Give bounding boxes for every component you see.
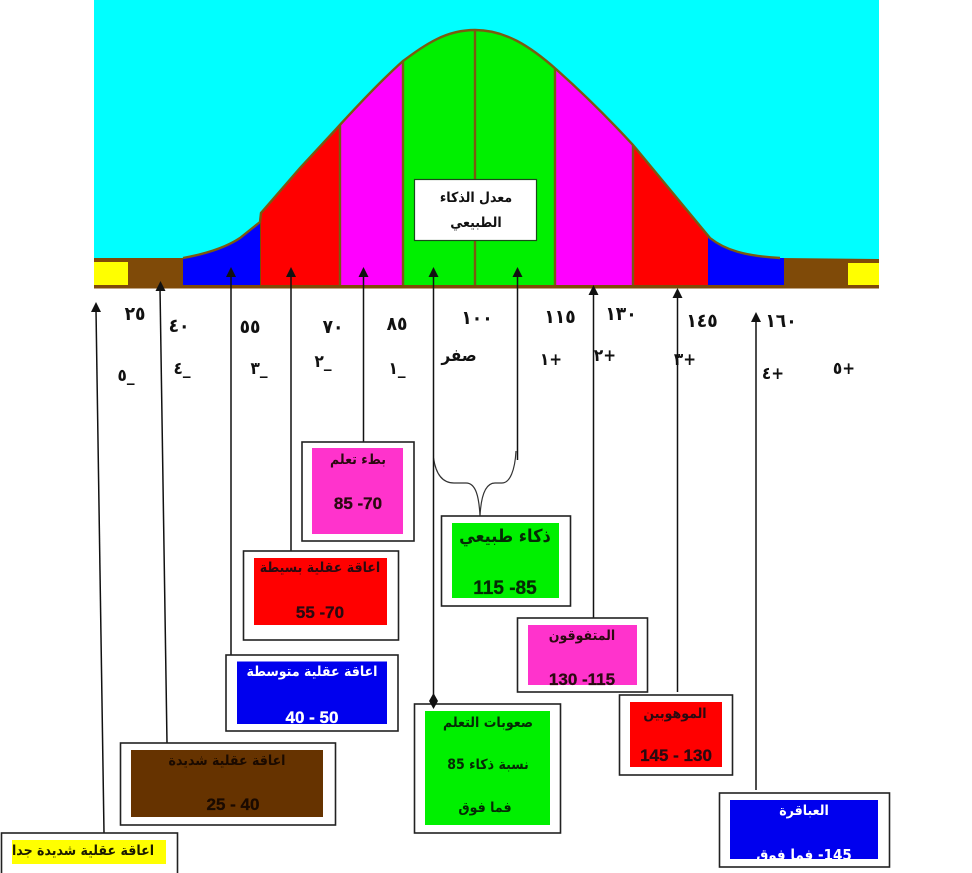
arrow: slow learner	[358, 267, 368, 442]
standard deviation labels: ٢_	[314, 352, 332, 372]
standard deviation labels: ٢+	[594, 346, 616, 366]
label: average intelligence: معدل الذكاء	[440, 190, 512, 206]
panel: superior: المتفوقون	[549, 628, 615, 644]
standard deviation labels: صفر	[440, 346, 477, 366]
IQ scale numbers: ٢٥	[125, 303, 145, 325]
IQ scale numbers: ١٤٥	[686, 310, 718, 332]
bell curve chart	[94, 0, 879, 288]
panel: learning difficulties: صعوبات التعلم	[443, 715, 533, 731]
standard deviation labels	[118, 346, 855, 386]
panel: moderate disability: اعاقة عقلية متوسطة	[246, 664, 378, 680]
arrow: normal intelligence	[512, 267, 522, 460]
standard deviation labels: ٤_	[174, 359, 191, 379]
panel: mild disability	[244, 551, 398, 640]
panel: genius: العباقرة	[779, 803, 829, 819]
label: average intelligence: الطبيعي	[450, 215, 502, 231]
standard deviation labels: ٤+	[762, 364, 784, 384]
standard deviation labels: ٣_	[250, 359, 268, 379]
panel: very severe disability	[2, 833, 178, 873]
panel: genius: 145- فما فوق	[756, 846, 852, 864]
panel: severe disability: اعاقة عقلية شديدة	[169, 753, 285, 769]
panel: genius	[720, 793, 890, 867]
IQ scale numbers: ١٠٠	[461, 307, 493, 329]
panel: learning difficulties	[414, 704, 560, 833]
standard deviation labels: ١_	[388, 359, 406, 379]
label: average intelligence	[414, 180, 536, 240]
IQ scale numbers: ٤٠	[169, 315, 189, 337]
panel: gifted	[620, 695, 732, 775]
arrow: superior	[588, 285, 598, 618]
IQ scale numbers: ٨٥	[387, 313, 407, 335]
curve segments	[94, 31, 879, 285]
panel: superior: 130 -115	[549, 670, 615, 689]
arrow: mild	[286, 267, 296, 551]
IQ scale numbers: ١٣٠	[605, 303, 637, 325]
panel: learning difficulties: نسبة ذكاء 85	[447, 757, 529, 773]
panel: slow learner: 85 -70	[334, 494, 382, 513]
IQ scale numbers: ١١٥	[544, 306, 576, 328]
brace: normal range	[434, 451, 516, 516]
panel: gifted: الموهوبين	[643, 706, 707, 722]
panel: normal intelligence: ذكاء طبيعي	[459, 526, 551, 547]
panel: mild disability: اعاقة عقلية بسيطة	[260, 560, 380, 576]
IQ scale numbers: ٧٠	[323, 316, 343, 338]
arrow: severe	[156, 281, 167, 743]
panel: severe disability: 25 - 40	[207, 795, 259, 814]
panel: superior	[518, 618, 648, 692]
arrow: very severe	[91, 302, 104, 833]
IQ scale numbers	[125, 303, 797, 338]
panel: normal intelligence	[442, 516, 570, 606]
panel: moderate disability	[226, 655, 398, 731]
arrow: gifted	[672, 288, 682, 692]
panel: normal intelligence: 115 -85	[473, 578, 537, 599]
panel: slow learner	[302, 442, 414, 541]
IQ scale numbers: ٥٥	[240, 316, 260, 338]
arrow: learning difficulties	[428, 267, 438, 709]
panel: mild disability: 55 -70	[296, 603, 344, 622]
standard deviation labels: ١+	[540, 350, 562, 370]
panel: gifted: 145 - 130	[640, 746, 712, 765]
curve outline	[183, 30, 780, 258]
standard deviation labels: ٥+	[833, 359, 855, 379]
panel: very severe disability: اعاقة عقلية شديدة جدا	[12, 843, 154, 859]
standard deviation labels: ٣+	[674, 350, 696, 370]
standard deviation labels: ٥_	[118, 366, 135, 386]
panel: learning difficulties: فما فوق	[458, 800, 512, 816]
IQ scale numbers: ١٦٠	[765, 310, 797, 332]
panel: severe disability	[120, 743, 336, 825]
panel: slow learner: بطء تعلم	[330, 452, 386, 468]
panel: moderate disability: 40 - 50	[286, 708, 338, 727]
arrow: moderate	[226, 267, 236, 655]
chart background	[94, 0, 879, 288]
arrow: genius	[751, 312, 761, 790]
baseline	[94, 285, 879, 288]
